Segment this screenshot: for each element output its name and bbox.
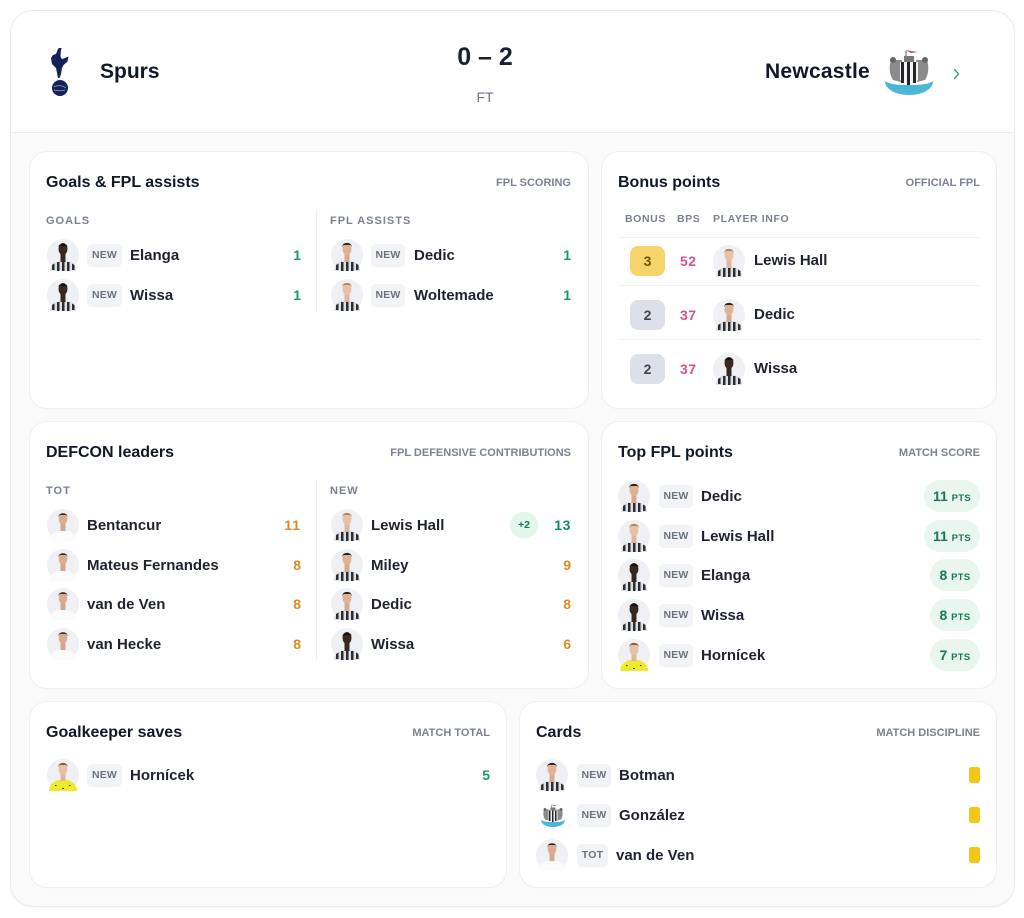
row: Wissa: Wissa [371, 636, 414, 653]
panel: cards [520, 702, 996, 887]
row: Wissa bonus: 37 [680, 361, 697, 377]
panel: goals and FPL assists [30, 152, 588, 408]
heading: Goals & FPL assists [46, 174, 200, 191]
away team name: Newcastle [765, 60, 870, 83]
row: Miley: 9 [563, 557, 571, 573]
row: Lewis Hall bonus: Lewis Hall [754, 252, 827, 269]
row: van de Ven: van de Ven [87, 596, 165, 613]
row: van de Ven: 8 [293, 596, 301, 612]
row: González: NEW [581, 809, 607, 821]
row: Hornícek [47, 759, 490, 791]
row: Wissa bonus: 2 [644, 361, 651, 377]
row: van de Ven [536, 839, 980, 867]
row: Hornícek: 5 [482, 767, 490, 783]
row: Wissa bonus: Wissa [754, 360, 797, 377]
row: Elanga [618, 559, 980, 591]
row: Woltemade: NEW [375, 289, 401, 301]
match header [11, 11, 1014, 133]
row: Elanga: Elanga [130, 247, 179, 264]
row: Hornícek: Hornícek [130, 767, 194, 784]
row: Dedic: 1 [563, 247, 571, 263]
panel tag: OFFICIAL FPL [906, 177, 980, 189]
panel tag: FPL DEFENSIVE CONTRIBUTIONS [390, 447, 571, 459]
row: Lewis Hall bonus [630, 245, 827, 277]
row: Dedic: Dedic [371, 596, 412, 613]
row: Lewis Hall bonus: 3 [644, 253, 651, 269]
row: Dedic: NEW [375, 249, 401, 261]
row: Dedic [331, 239, 571, 271]
row: González [541, 804, 980, 827]
panel tag: MATCH SCORE [899, 447, 980, 459]
row: Lewis Hall: Lewis Hall [701, 528, 774, 545]
row: Dedic bonus: Dedic [754, 306, 795, 323]
row: Miley [331, 549, 571, 581]
row: Lewis Hall [331, 509, 571, 541]
column heading: TOT: TOT [46, 485, 71, 497]
row: Hornícek: 7 PTS [939, 647, 971, 663]
row: Dedic bonus: 2 [644, 307, 651, 323]
row: Lewis Hall: NEW [663, 530, 689, 542]
row: Lewis Hall [618, 520, 980, 552]
row: Mateus Fernandes: Mateus Fernandes [87, 557, 219, 574]
row: Wissa: Wissa [701, 607, 744, 624]
row: Dedic [618, 480, 980, 512]
row: Wissa bonus [630, 353, 798, 385]
row: Wissa [331, 628, 571, 660]
icon: chevron arrow [954, 68, 960, 80]
panel: goalkeeper saves [30, 702, 506, 887]
column header: bonus: BONUS [625, 213, 666, 225]
row: Woltemade: Woltemade [414, 287, 494, 304]
row: Bentancur: Bentancur [87, 517, 161, 534]
row: van de Ven: van de Ven [616, 847, 694, 864]
score: 0 – 2 [457, 43, 513, 71]
panel tag: MATCH TOTAL [412, 727, 490, 739]
panel tag: MATCH DISCIPLINE [876, 727, 980, 739]
heading: Goalkeeper saves [46, 724, 182, 741]
row: Wissa: 6 [563, 636, 571, 652]
row: Dedic [331, 588, 571, 620]
row: Wissa: 1 [293, 287, 301, 303]
row: Elanga [47, 239, 301, 271]
row: Elanga: NEW [663, 569, 689, 581]
row: Dedic: Dedic [414, 247, 455, 264]
row: Hornícek: NEW [92, 769, 117, 781]
row: Hornícek: Hornícek [701, 647, 765, 664]
row: Woltemade: 1 [563, 287, 571, 303]
row: Dedic bonus: 37 [680, 307, 697, 323]
row: Dedic: 8 [563, 596, 571, 612]
heading: DEFCON leaders [46, 444, 174, 461]
heading: Bonus points [618, 174, 720, 191]
row: Wissa [618, 599, 980, 631]
column heading: NEW: NEW [330, 485, 359, 497]
row: Dedic: NEW [663, 490, 689, 502]
heading: Top FPL points [618, 444, 733, 461]
row: Botman [536, 759, 980, 791]
heading: Cards [536, 724, 581, 741]
panel: DEFCON leaders [30, 422, 588, 688]
row: Lewis Hall: 13 [554, 517, 571, 533]
row: Wissa: Wissa [130, 287, 173, 304]
row: Elanga: Elanga [701, 567, 750, 584]
panel: bonus points [602, 152, 996, 408]
row: van Hecke [47, 628, 301, 654]
row: Lewis Hall: Lewis Hall [371, 517, 444, 534]
row: Hornícek [618, 639, 980, 671]
row: van de Ven: TOT [582, 849, 603, 861]
row: Wissa: NEW [92, 289, 117, 301]
panel tag: FPL SCORING [496, 177, 571, 189]
row: van de Ven [47, 588, 301, 614]
row: Botman: Botman [619, 767, 675, 784]
row: Wissa: NEW [663, 609, 689, 621]
panel: top FPL points [602, 422, 996, 688]
row: Dedic: 11 PTS [933, 488, 971, 504]
icon: Spurs crest [51, 48, 68, 96]
icon: Newcastle crest [885, 50, 933, 95]
row: Lewis Hall bonus: 52 [680, 253, 697, 269]
column header: player info: PLAYER INFO [713, 213, 789, 225]
row: Bentancur [47, 509, 301, 536]
row: Mateus Fernandes [47, 549, 301, 576]
row: González: González [619, 807, 685, 824]
column header: BPS: BPS [677, 213, 700, 225]
row: Botman: NEW [581, 769, 607, 781]
row: van Hecke: van Hecke [87, 636, 161, 653]
column heading: FPL assists: FPL ASSISTS [330, 215, 411, 227]
row: Woltemade [331, 279, 571, 311]
home team name: Spurs [100, 60, 160, 83]
row: Elanga: 8 PTS [939, 567, 971, 583]
match status: FT [476, 89, 494, 105]
row: van Hecke: 8 [293, 636, 301, 652]
row: Lewis Hall: 11 PTS [933, 528, 971, 544]
row: Elanga: 1 [293, 247, 301, 263]
row: Dedic: Dedic [701, 488, 742, 505]
column heading: goals: GOALS [46, 215, 90, 227]
row: Dedic bonus [630, 299, 795, 331]
row: Wissa: 8 PTS [939, 607, 971, 623]
row: Elanga: NEW [92, 249, 117, 261]
row: Bentancur: 11 [284, 517, 301, 533]
row: Hornícek: NEW [663, 649, 689, 661]
row: Wissa [47, 279, 301, 311]
row: Miley: Miley [371, 557, 409, 574]
row: Mateus Fernandes: 8 [293, 557, 301, 573]
row: Lewis Hall: +2 [518, 519, 530, 531]
